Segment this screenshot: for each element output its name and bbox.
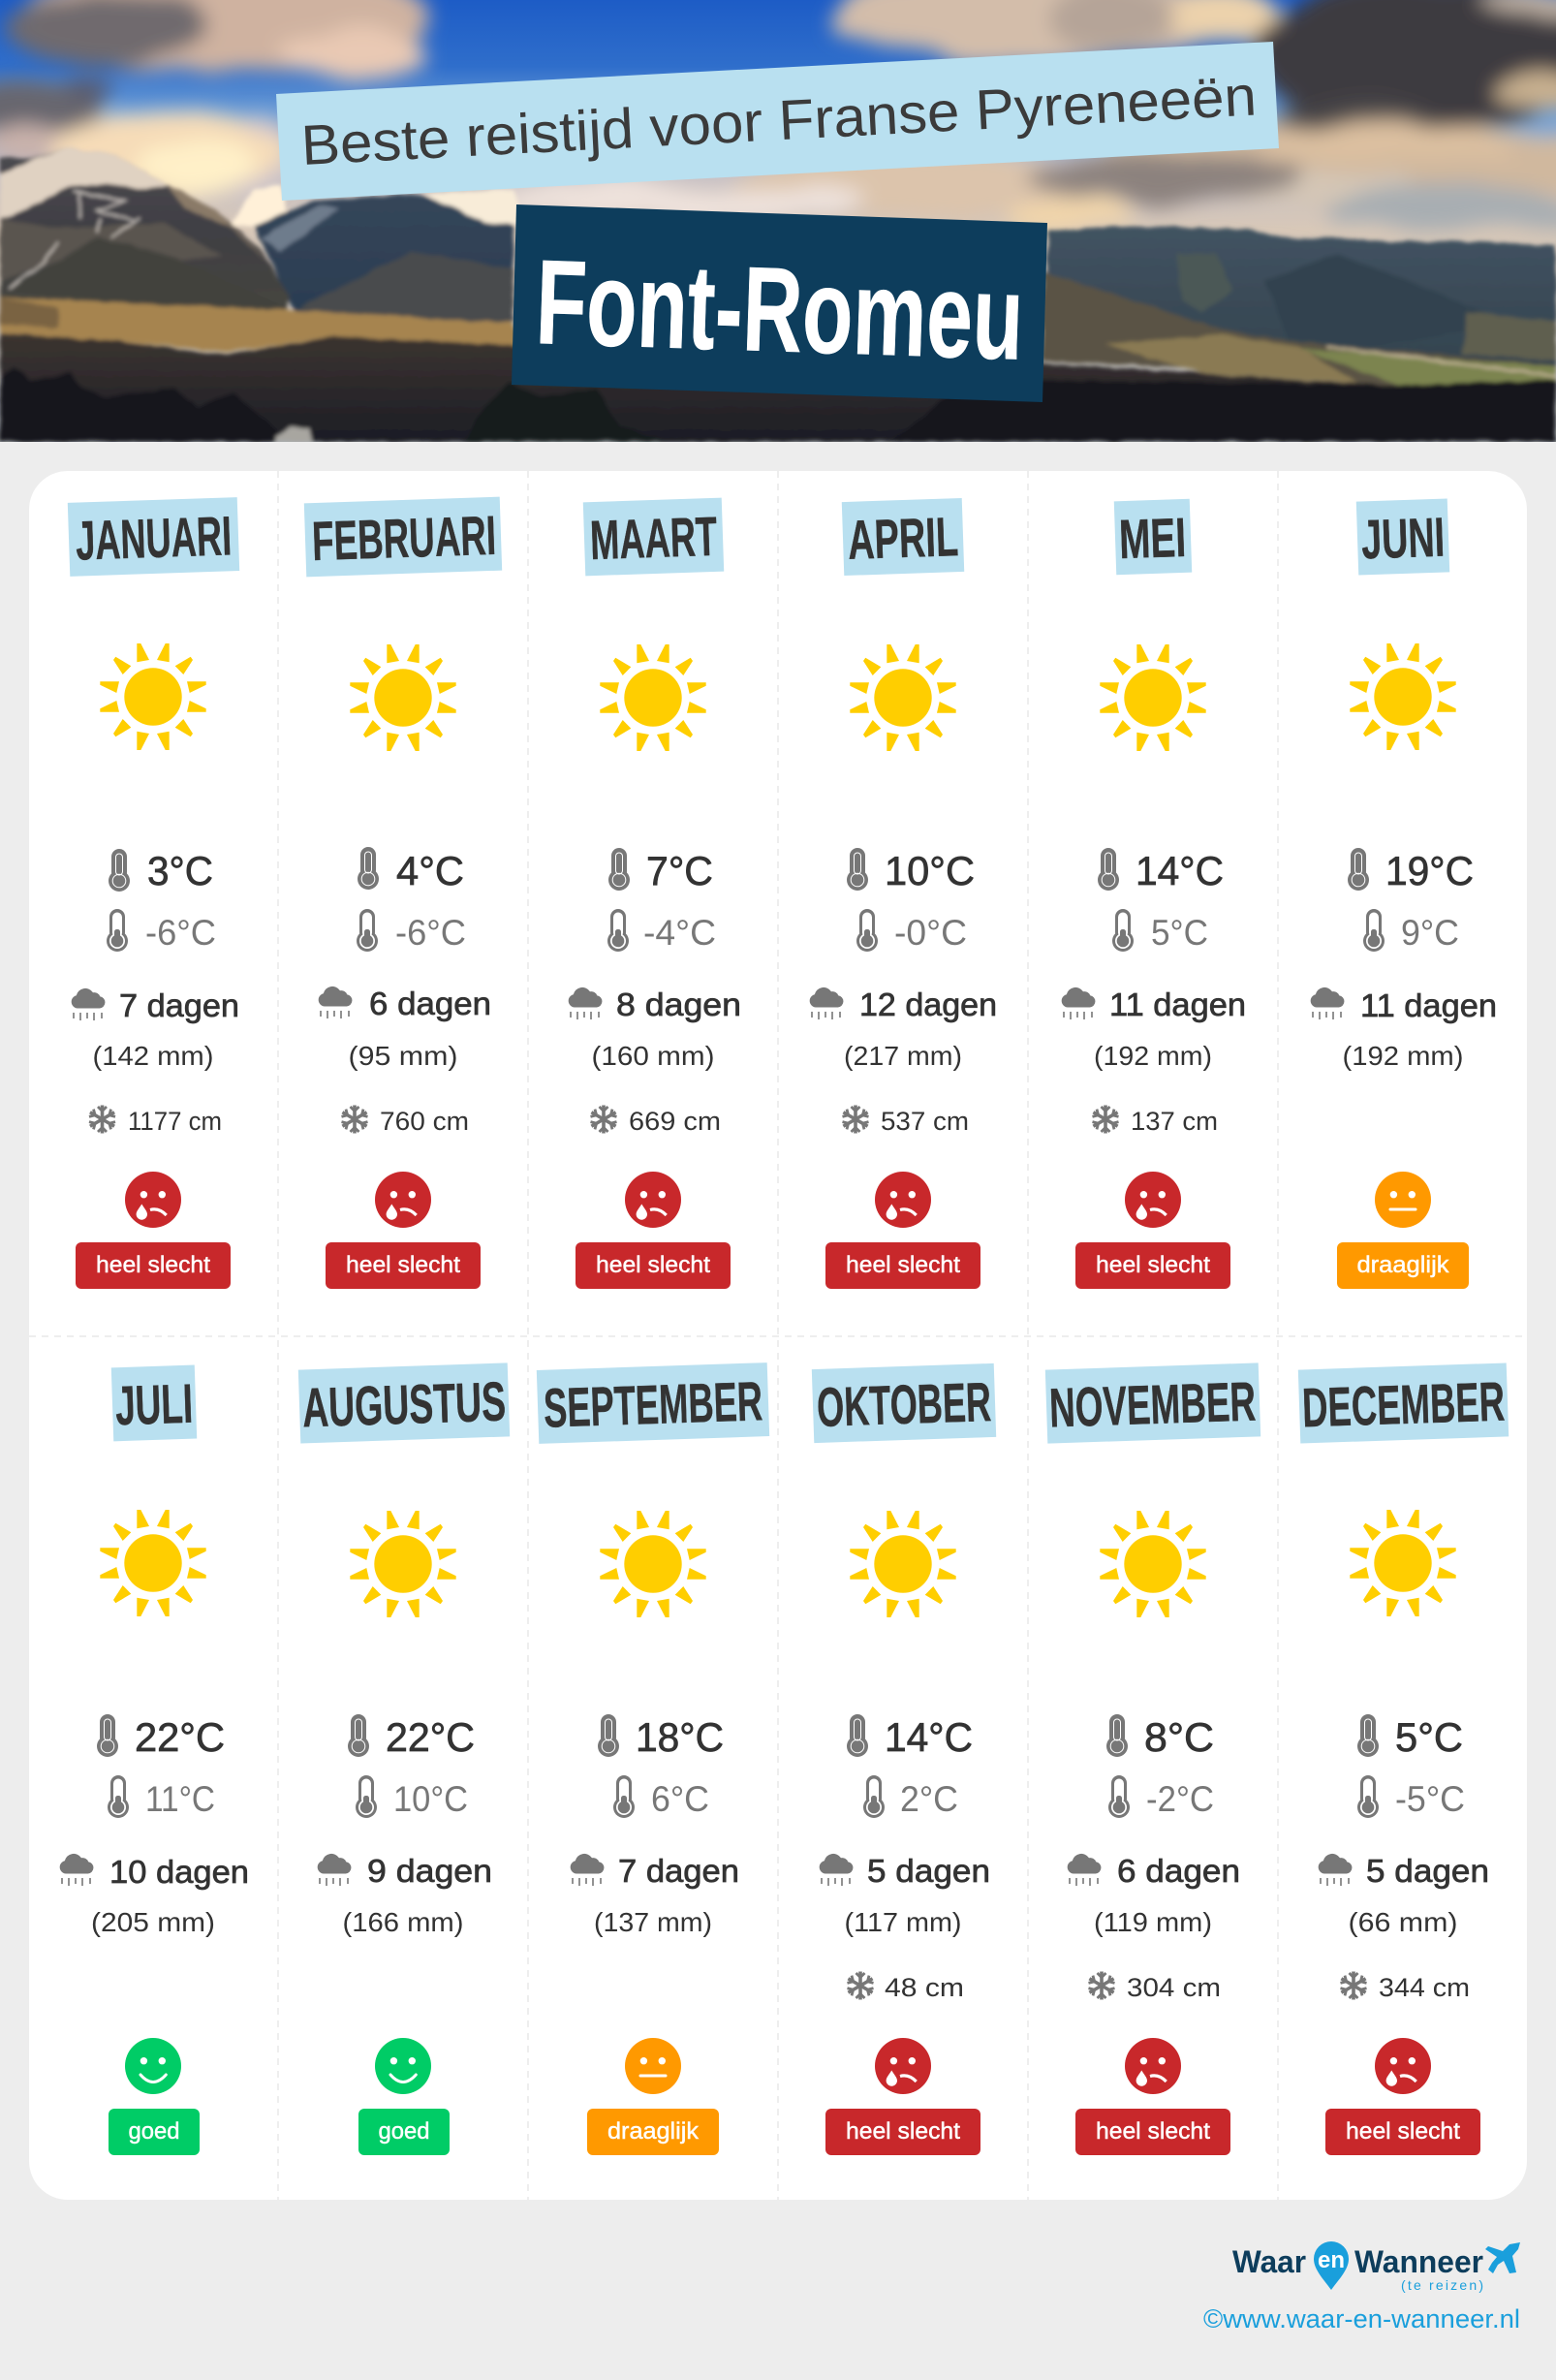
rating badge: heel slecht [1346, 2118, 1460, 2145]
icon: sun [600, 1511, 706, 1617]
panel: climate table background [29, 471, 1527, 2200]
icon: sun [850, 1511, 956, 1617]
icon: rating face [625, 1172, 681, 1228]
min temperature [107, 909, 216, 953]
min temperature: -0°C [894, 913, 967, 953]
max temperature: 8°C [1144, 1714, 1214, 1760]
min temperature: -6°C [395, 913, 466, 953]
max temperature: 4°C [396, 848, 464, 893]
month heading [111, 1365, 197, 1441]
rating badge [825, 2109, 980, 2155]
min temperature [863, 1775, 958, 1819]
rain days [820, 1853, 990, 1889]
snow depth: 48 cm [885, 1973, 964, 2002]
rain days: 7 dagen [119, 987, 239, 1023]
snow depth: 137 cm [1131, 1107, 1218, 1136]
max temperature: 19°C [1385, 848, 1474, 893]
month heading: SEPTEMBER [543, 1370, 763, 1440]
rating badge [76, 1242, 231, 1289]
rating badge [1075, 1242, 1230, 1289]
rating badge: heel slecht [846, 1252, 960, 1278]
rainfall: (217 mm) [844, 1041, 962, 1071]
max temperature [358, 847, 464, 893]
panel: februari [304, 497, 502, 1289]
month heading [1045, 1362, 1260, 1444]
snow depth [589, 1105, 721, 1136]
rating badge [109, 2109, 200, 2155]
snow depth: 344 cm [1379, 1973, 1470, 2002]
month heading [583, 498, 724, 576]
icon: plane [1485, 2242, 1520, 2273]
rating badge [358, 2109, 450, 2155]
rain days [571, 1853, 739, 1889]
title block [512, 204, 1047, 402]
panel: juli [60, 1365, 249, 2155]
max temperature: 14°C [885, 1714, 973, 1760]
rating badge: goed [128, 2118, 180, 2145]
rain days: 11 dagen [1360, 987, 1497, 1023]
icon: rating face [1375, 1172, 1431, 1228]
month heading [304, 497, 502, 577]
min temperature [856, 909, 967, 953]
month heading: APRIL [847, 506, 959, 572]
icon: sun [100, 643, 206, 750]
icon: sun [1350, 643, 1456, 750]
icon: sun [600, 644, 706, 751]
month heading: FEBRUARI [311, 505, 497, 573]
rainfall: (160 mm) [591, 1041, 715, 1071]
logo: Waar en Wanneer: Waar [1232, 2244, 1306, 2279]
snow depth: 304 cm [1127, 1973, 1221, 2002]
website credit: ©www.waar-en-wanneer.nl [1203, 2304, 1520, 2333]
rainfall: (205 mm) [91, 1907, 215, 1937]
rainfall: (192 mm) [1343, 1041, 1463, 1071]
max temperature [598, 1714, 724, 1760]
min temperature [607, 909, 716, 953]
rain days: 6 dagen [1117, 1853, 1240, 1889]
rating badge [1325, 2109, 1480, 2155]
panel: maart [569, 498, 741, 1289]
snow depth [1091, 1105, 1218, 1136]
panel: oktober [812, 1363, 996, 2155]
subtitle band [276, 42, 1279, 201]
month heading [812, 1363, 996, 1443]
max temperature: 18°C [636, 1714, 724, 1760]
max temperature: 5°C [1395, 1714, 1463, 1760]
rating badge: heel slecht [596, 1252, 710, 1278]
rain days: 9 dagen [367, 1853, 492, 1889]
min temperature: 5°C [1151, 913, 1208, 953]
rating badge [825, 1242, 980, 1289]
icon: sun [1350, 1510, 1456, 1616]
month heading: JULI [114, 1373, 194, 1437]
snow depth: 1177 cm [128, 1107, 222, 1136]
min temperature: 2°C [900, 1779, 958, 1819]
rain days [319, 986, 491, 1021]
icon: rating face [1125, 1172, 1181, 1228]
rating badge: heel slecht [96, 1252, 210, 1278]
icon: rating face [625, 2038, 681, 2094]
snow depth [88, 1105, 222, 1136]
rain days [569, 986, 741, 1022]
icon: rating face [125, 1172, 181, 1228]
rating badge [1075, 2109, 1230, 2155]
snow depth [340, 1105, 469, 1136]
hero photo: mountains under cloudy sky [0, 0, 1556, 442]
rating badge: heel slecht [1096, 2118, 1210, 2145]
min temperature: 6°C [651, 1779, 709, 1819]
icon: sun [850, 644, 956, 751]
snow depth [846, 1971, 964, 2002]
min temperature: 10°C [393, 1779, 468, 1819]
max temperature [1098, 848, 1224, 893]
panel: april [810, 498, 997, 1289]
icon: rating face [875, 2038, 931, 2094]
snow depth [1087, 1971, 1221, 2002]
month heading: NOVEMBER [1048, 1371, 1257, 1440]
logo: Waar en Wanneer: (te reizen) [1401, 2277, 1483, 2293]
month heading: AUGUSTUS [301, 1371, 507, 1439]
rating badge [576, 1242, 731, 1289]
month heading [537, 1362, 769, 1444]
icon: map pin: en [1318, 2247, 1345, 2273]
icon: rating face [375, 2038, 431, 2094]
max temperature: 22°C [135, 1714, 225, 1760]
month heading [298, 1362, 510, 1444]
max temperature [1357, 1714, 1463, 1760]
rating badge [587, 2109, 719, 2155]
rating badge: draaglijk [607, 2118, 700, 2145]
snow depth: 537 cm [881, 1107, 969, 1136]
snow depth [841, 1105, 969, 1136]
min temperature: -5°C [1395, 1779, 1465, 1819]
rain days: 12 dagen [859, 986, 997, 1022]
max temperature: 3°C [147, 848, 213, 893]
rain days: 8 dagen [616, 986, 741, 1022]
min temperature: 9°C [1401, 913, 1459, 953]
icon: sun [1100, 644, 1206, 751]
icon: rating face [125, 2038, 181, 2094]
max temperature [847, 1714, 973, 1760]
rating badge: goed [378, 2118, 430, 2145]
rainfall: (95 mm) [349, 1041, 457, 1071]
rain days: 11 dagen [1109, 986, 1246, 1022]
icon: map pin [1314, 2241, 1349, 2290]
min temperature: -2°C [1146, 1779, 1214, 1819]
rating badge: heel slecht [346, 1252, 460, 1278]
snow depth [1339, 1971, 1470, 2002]
rain days [1068, 1853, 1240, 1889]
rain days: 5 dagen [1366, 1853, 1489, 1889]
min temperature [613, 1775, 709, 1819]
month heading [1114, 499, 1192, 575]
icon: sun [100, 1510, 206, 1616]
panel: juni [1311, 498, 1497, 1289]
month heading: MEI [1118, 507, 1187, 571]
max temperature [1106, 1714, 1214, 1760]
logo: Waar en Wanneer [1232, 2241, 1520, 2293]
max temperature: 7°C [646, 848, 713, 893]
max temperature: 14°C [1136, 848, 1224, 893]
max temperature [1348, 848, 1474, 893]
min temperature: -6°C [145, 913, 216, 953]
snow depth: 760 cm [380, 1107, 469, 1136]
max temperature [608, 848, 713, 893]
rating badge: heel slecht [846, 2118, 960, 2145]
min temperature [1112, 909, 1208, 953]
rain days: 7 dagen [618, 1853, 739, 1889]
panel: mei [1062, 499, 1246, 1289]
month heading: JANUARI [75, 505, 233, 573]
icon: rating face [1125, 2038, 1181, 2094]
icon: sun [1100, 1511, 1206, 1617]
month heading: JUNI [1360, 507, 1446, 571]
max temperature: 10°C [885, 848, 975, 893]
icon: sun [350, 644, 456, 751]
rainfall: (66 mm) [1349, 1907, 1457, 1937]
month heading: MAART [589, 506, 718, 572]
panel: september [537, 1362, 769, 2155]
min temperature [1363, 909, 1459, 953]
rain days [1319, 1853, 1489, 1889]
panel: december [1298, 1362, 1509, 2155]
min temperature [108, 1775, 215, 1819]
rainfall: (142 mm) [93, 1041, 213, 1071]
panel: januari [68, 497, 239, 1289]
min temperature [357, 909, 466, 953]
icon: rating face [875, 1172, 931, 1228]
icon: rating face [1375, 2038, 1431, 2094]
subtitle band: Beste reistijd voor Franse Pyreneeën [299, 64, 1258, 177]
max temperature [109, 848, 213, 893]
rainfall: (137 mm) [594, 1907, 712, 1937]
rainfall: (117 mm) [845, 1907, 961, 1937]
max temperature [348, 1714, 475, 1760]
month heading: OKTOBER [816, 1371, 992, 1439]
max temperature: 22°C [386, 1714, 475, 1760]
logo: Waar en Wanneer: Wanneer [1354, 2244, 1483, 2279]
min temperature: -4°C [643, 913, 716, 953]
rainfall: (192 mm) [1094, 1041, 1212, 1071]
min temperature [1108, 1775, 1214, 1819]
rainfall: (166 mm) [343, 1907, 463, 1937]
rainfall: (119 mm) [1094, 1907, 1212, 1937]
icon: sun [350, 1511, 456, 1617]
rating badge [1337, 1242, 1469, 1289]
min temperature [356, 1775, 468, 1819]
snow depth: 669 cm [629, 1107, 721, 1136]
month heading [68, 497, 239, 577]
rating badge: heel slecht [1096, 1252, 1210, 1278]
title block: Font-Romeu [534, 235, 1025, 386]
min temperature [1357, 1775, 1465, 1819]
rain days: 5 dagen [867, 1853, 990, 1889]
icon: rating face [375, 1172, 431, 1228]
rating badge: draaglijk [1356, 1252, 1450, 1278]
rain days: 6 dagen [369, 986, 491, 1021]
min temperature: 11°C [145, 1779, 215, 1819]
rain days [72, 987, 239, 1023]
month heading [1356, 498, 1449, 576]
rain days: 10 dagen [109, 1854, 249, 1890]
panel: november [1045, 1362, 1260, 2155]
rating badge [326, 1242, 481, 1289]
rain days [318, 1853, 492, 1889]
panel: augustus [298, 1362, 510, 2155]
month heading [842, 498, 964, 576]
